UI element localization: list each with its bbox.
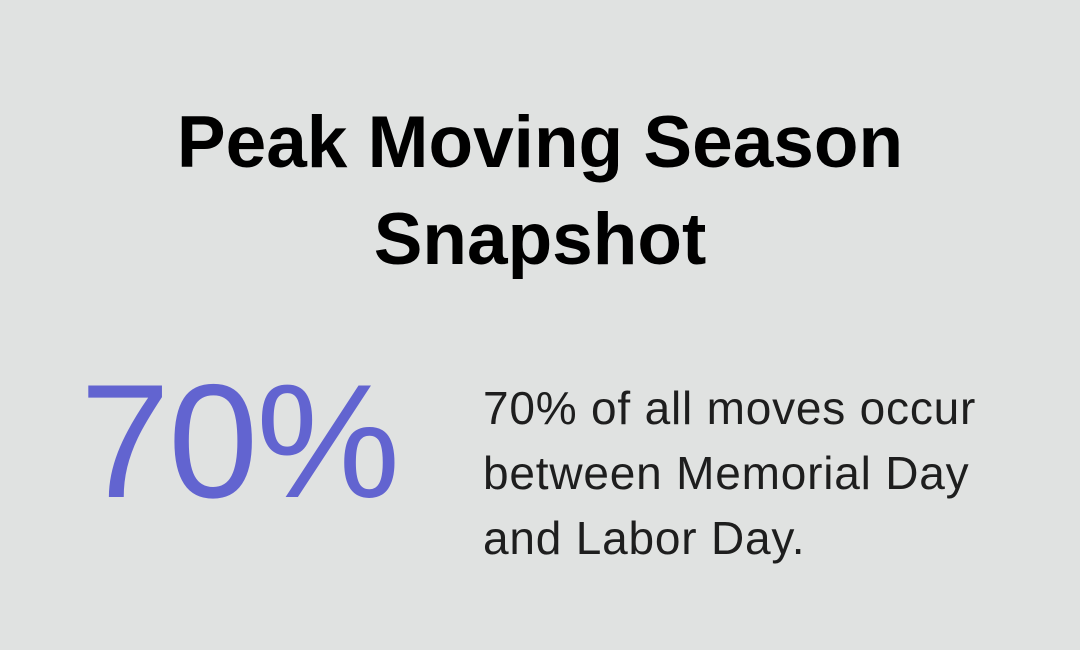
title: Peak Moving Season [177,102,903,183]
description text: 70% of all moves occur [483,382,976,434]
description text: and Labor Day. [483,512,805,564]
description text: between Memorial Day [483,447,969,499]
title [177,102,903,280]
big stat: 70%: 70% [80,351,398,532]
title: Snapshot [374,199,706,280]
description text [483,382,976,564]
